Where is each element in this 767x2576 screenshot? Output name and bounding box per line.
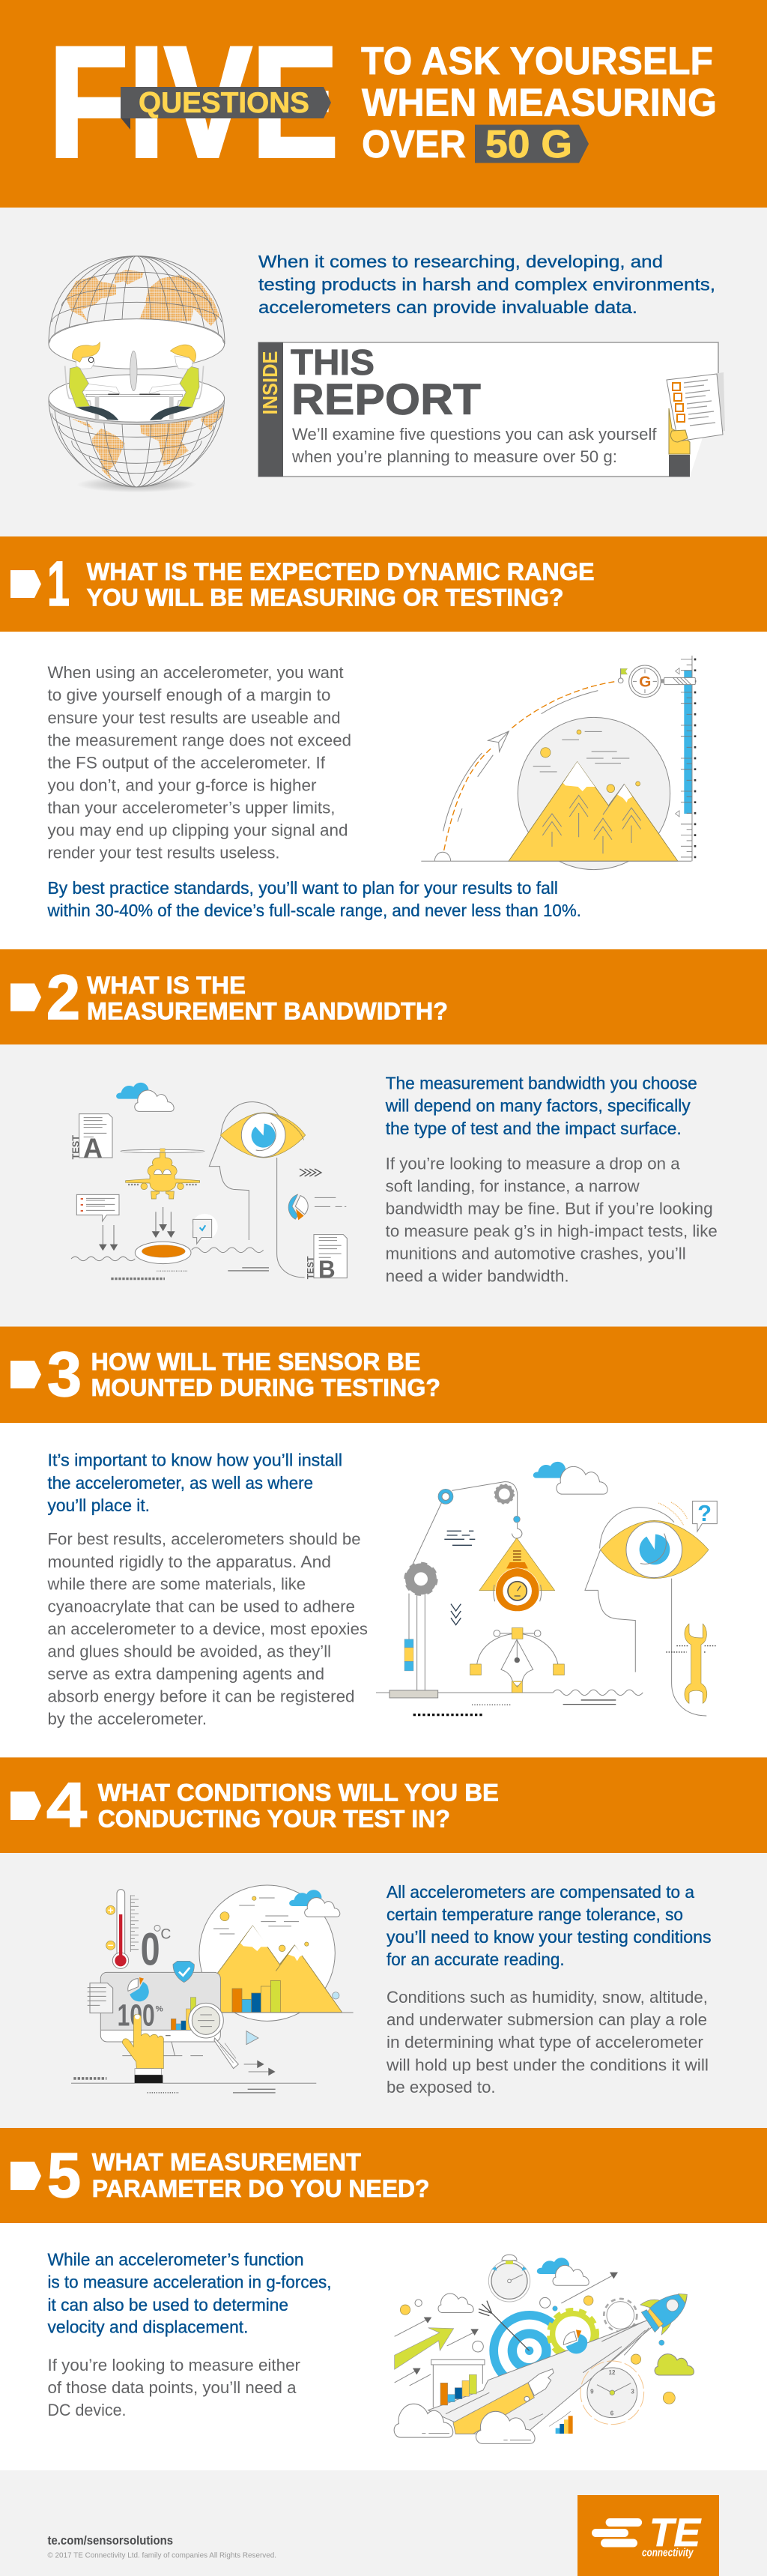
question bubble [693,1501,717,1532]
wrench [685,1624,707,1703]
globe shadow [76,477,196,492]
ground line [421,852,691,861]
question 1: WHAT IS THE EXPECTED DYNAMIC RANGE [87,558,595,585]
intro statement: testing products in harsh and complex environments, [258,274,715,294]
check bubble [192,1214,218,1244]
document: test A [71,1114,112,1164]
helicopter [121,1149,204,1199]
section 3 paragraph: while there are some materials, like [47,1574,306,1593]
clock: 3 [631,2388,634,2395]
section 5 callout: velocity and displacement. [48,2318,249,2337]
ruler [676,656,695,861]
pie chart [128,1977,149,2001]
footer [48,2495,719,2576]
section 1 body text: to give yourself enough of a margin to [48,686,330,704]
mountains [189,1926,342,2013]
number 3: 3 [47,1339,82,1409]
section 4 paragraph: be exposed to. [386,2078,496,2096]
gears [548,2299,637,2359]
speech bubble checklist [76,1194,119,1221]
panel: inside this report [258,342,725,477]
heading REPORT: REPORT [291,375,481,424]
top clouds [537,2258,589,2285]
section 2 header band [0,949,767,1044]
down arrows [99,1207,175,1251]
ground with base and wave [376,1690,643,1698]
question bubble: ? [697,1501,712,1526]
ground lines [71,2013,354,2083]
clouds [116,1083,174,1111]
section 5 callout: is to measure acceleration in g-forces, [48,2273,331,2292]
section 3 callout [48,1451,342,1515]
title word FIVE: FIVE [49,13,339,190]
arrows [244,2061,276,2075]
section 3 callout: It’s important to know how you’ll install [48,1451,342,1470]
left cloud [438,2294,473,2312]
monitor [100,1972,220,2056]
section 2 callout [385,1073,697,1138]
arm and hand [453,2369,554,2434]
section 4 callout: All accelerometers are compensated to a [386,1882,695,1902]
accelerometer on triangle [479,1538,555,1612]
bubble [333,1992,339,1999]
number 5: 5 [47,2140,81,2210]
section 4 paragraph: and underwater submersion can play a role [386,2010,707,2029]
section 2 paragraph: soft landing, for instance, a narrow [386,1177,640,1196]
section 5 callout [48,2249,331,2337]
section 1 body text: render your test results useless. [48,844,280,862]
bottom clouds [394,2404,535,2443]
section 2 paragraph: bandwidth may be fine. But if you’re looking [386,1199,713,1218]
report description: when you’re planning to measure over 50 g: [291,447,617,466]
QUESTIONS ribbon [121,87,331,130]
intro statement: accelerometers can provide invaluable data. [258,297,637,317]
section 3 paragraph: cyanoacrylate that can be used to adhere [48,1597,355,1615]
TE connectivity logo [577,2495,719,2576]
illustration: sensor mounting rig and thinking head [376,1462,717,1716]
right engineer [148,345,204,420]
question 1: YOU WILL BE MEASURING OR TESTING? [87,584,564,611]
side document [88,1983,113,2013]
report description [291,425,657,466]
number 4: 4 [46,1770,87,1840]
stopwatch [488,2255,530,2302]
upper hemisphere [48,256,225,369]
green growth arrow [395,2328,454,2369]
intro statement: When it comes to researching, developing, and [258,252,663,271]
bar chart [232,1980,280,2013]
monitor and desk [86,351,182,419]
section 1 body text: you may end up clipping your signal and [48,821,348,839]
head profile with eye [585,1502,709,1716]
section 2 paragraph: If you’re looking to measure a drop on a [386,1155,680,1173]
target [479,2301,569,2391]
sun disk background [199,1885,335,2021]
arrow marker [10,983,41,1012]
pen tool [470,1628,564,1693]
green cloud [655,2354,694,2375]
section 5 paragraph [48,2356,300,2419]
dark lines [444,1531,475,1545]
pie over gear [563,2329,587,2353]
section 1 body text: ensure your test results are useable and [48,709,340,727]
G gauge magnifier: G [639,674,651,691]
flag [618,668,628,683]
question 3: MOUNTED DURING TESTING? [91,1374,440,1401]
section 3 header band [0,1326,767,1423]
pointing hand [122,2014,163,2083]
question 2: WHAT IS THE [87,972,246,999]
copyright: © 2017 TE Connectivity Ltd. family of companies All Rights Reserved. [48,2551,276,2560]
section 3 paragraph: an accelerometer to a device, most epoxies [48,1620,368,1639]
document: test A: A [83,1132,103,1164]
chevrons down [451,1604,461,1625]
section 2 callout: the type of test and the impact surface. [386,1119,682,1138]
section 2 paragraph: to measure peak g’s in high-impact tests, like [386,1221,718,1240]
paper plane [488,731,509,752]
landing surface [71,1242,264,1264]
question 4: WHAT CONDITIONS WILL YOU BE [98,1780,499,1806]
question 2 [87,972,448,1025]
section 2 body text [385,1073,718,1285]
clock: 9 [590,2388,594,2395]
number 2: 2 [46,962,80,1032]
question 1 [87,558,595,611]
section 4 paragraph: will hold up best under the conditions it will [386,2055,709,2074]
arrow marker [10,1361,41,1388]
arrow marker [10,570,41,598]
document: test B: B [318,1255,336,1283]
clouds [289,1890,340,1917]
website: te.com/sensorsolutions [48,2534,173,2548]
number 1: 1 [47,548,70,619]
pulley arm [412,1482,522,1566]
circles [400,2296,675,2404]
head profile with eye [209,1102,306,1278]
section 1 body text: the measurement range does not exceed [48,731,351,749]
illustration: test conditions dashboard [71,1885,354,2093]
report description: We’ll examine five questions you can ask yourself [292,425,657,444]
section 3 paragraph: For best results, accelerometers should be [48,1530,360,1549]
section 4 header band [0,1758,767,1853]
question 5: PARAMETER DO YOU NEED? [92,2175,430,2202]
section 4 callout: for an accurate reading. [386,1950,565,1969]
section 3 paragraph: serve as extra dampening agents and [48,1665,324,1683]
section 5 paragraph: DC device. [48,2401,126,2419]
small gear [495,1485,514,1503]
question 5 [92,2149,430,2202]
question 4 [98,1780,499,1832]
section 4 paragraph: in determining what type of accelerometer [386,2033,703,2052]
section 4 callout [386,1882,712,1969]
title line 2: WHEN MEASURING [362,81,717,124]
clouds [533,1462,607,1494]
section 1 body text: than your accelerometer’s upper limits, [48,799,336,817]
section 3 callout: you’ll place it. [48,1496,150,1515]
section 1 callout: By best practice standards, you’ll want to plan for your results to fall [48,878,558,898]
section 4 paragraph: Conditions such as humidity, snow, altitude, [386,1988,708,2007]
arrow marker [10,2162,41,2190]
lower hemisphere [48,375,225,487]
dotted lines [111,1268,269,1279]
section 4 paragraph [386,1988,709,2096]
arrow marker [10,1792,41,1820]
section 2 callout: The measurement bandwidth you choose [386,1073,697,1092]
section 1 callout [47,878,581,920]
zero degrees: 0 [141,1924,160,1976]
question 3: HOW WILL THE SENSOR BE [91,1349,421,1376]
dotted lines [413,1700,616,1715]
section 5 callout: it can also be used to determine [48,2295,288,2315]
magnifying glass [189,2003,238,2069]
illustration: g-force trajectory over mountains [421,656,695,870]
section 2 callout: will depend on many factors, specifically [385,1095,691,1115]
QUESTIONS ribbon: QUESTIONS [139,87,309,119]
section 3 paragraph: mounted rigidly to the apparatus. And [48,1552,331,1571]
section 5 paragraph: of those data points, you’ll need a [48,2378,297,2397]
50 G tag: 50 G [485,123,572,166]
section 3 paragraph: absorb energy before it can be registered [48,1687,355,1705]
shield [173,1961,194,1983]
document: test B [305,1235,347,1283]
wrench dots [666,1646,716,1652]
section 1 body text: the FS output of the accelerometer. If [48,754,326,772]
section 2 paragraph: munitions and automotive crashes, you’ll [386,1244,686,1263]
clock: 12 [609,2369,616,2376]
section 2 paragraph [386,1155,718,1285]
section 4 callout: certain temperature range tolerance, so [386,1905,683,1924]
section 1 body text: you don’t, and your g-force is higher [48,776,316,794]
section 5 header band [0,2128,767,2223]
icon: hand holding checklist [667,372,725,477]
clock [580,2361,644,2425]
mini bars [549,2411,573,2434]
document: test B: TEST [305,1256,315,1279]
illustration: split globe with two engineers [49,256,225,492]
mini bars [171,1998,196,2030]
section 1 body text: When using an accelerometer, you want [48,663,343,682]
header banner [0,0,767,208]
illustration: rocket launch and target [394,2255,694,2443]
play triangle [246,2031,258,2045]
section 5 callout: While an accelerometer’s function [48,2249,304,2269]
title line 3: OVER [362,123,466,166]
heading THIS: THIS [291,343,375,383]
section 1 header band [0,536,767,632]
100 percent: 100 [118,1998,155,2032]
TE connectivity logo: TE [649,2511,702,2555]
section 1 callout: within 30-40% of the device’s full-scale range, and never less than 10%. [47,901,581,920]
section 3 paragraph: by the accelerometer. [48,1709,207,1728]
document: test A: TEST [71,1135,82,1159]
thermometer [106,1890,139,1968]
section 5 paragraph: If you’re looking to measure either [48,2356,300,2374]
section 3 body text [47,1451,368,1728]
intro statement [258,252,715,317]
question 3 [91,1349,440,1401]
100 percent: % [156,2005,163,2014]
G gauge magnifier [629,665,695,698]
zero degrees: C [160,1926,171,1942]
bar chart frame [431,2359,485,2407]
section 5 body text [48,2249,331,2419]
clock: 6 [610,2410,614,2416]
illustration: test A and test B drop [71,1083,347,1283]
section 1 body text [48,663,351,862]
section 3 paragraph [47,1530,368,1728]
question 5: WHAT MEASUREMENT [92,2149,361,2176]
pie chart [288,1194,346,1220]
rocket exhaust [428,2319,654,2434]
section 3 callout: the accelerometer, as well as where [48,1473,313,1493]
left engineer [65,342,120,420]
INSIDE vertical label: INSIDE [258,351,282,415]
TE connectivity logo: connectivity [642,2546,694,2560]
dotted lines [73,2078,276,2093]
mountain scene [509,717,678,870]
question 2: MEASUREMENT BANDWIDTH? [87,998,448,1025]
large gear and support [404,1563,437,1690]
dashed trajectory [444,681,616,850]
section 4 callout: you’ll need to know your testing conditions [386,1927,712,1947]
speed lines [446,2322,649,2420]
section 3 paragraph: and glues should be avoided, as they’ll [48,1642,331,1661]
rocket [640,2294,687,2335]
chevrons [300,1169,321,1176]
question 4: CONDUCTING YOUR TEST IN? [98,1805,450,1832]
title line 1: TO ASK YOURSELF [361,40,713,83]
section 2 paragraph: need a wider bandwidth. [386,1266,569,1285]
section 4 body text [386,1882,712,2096]
thin arrows [395,2273,618,2386]
